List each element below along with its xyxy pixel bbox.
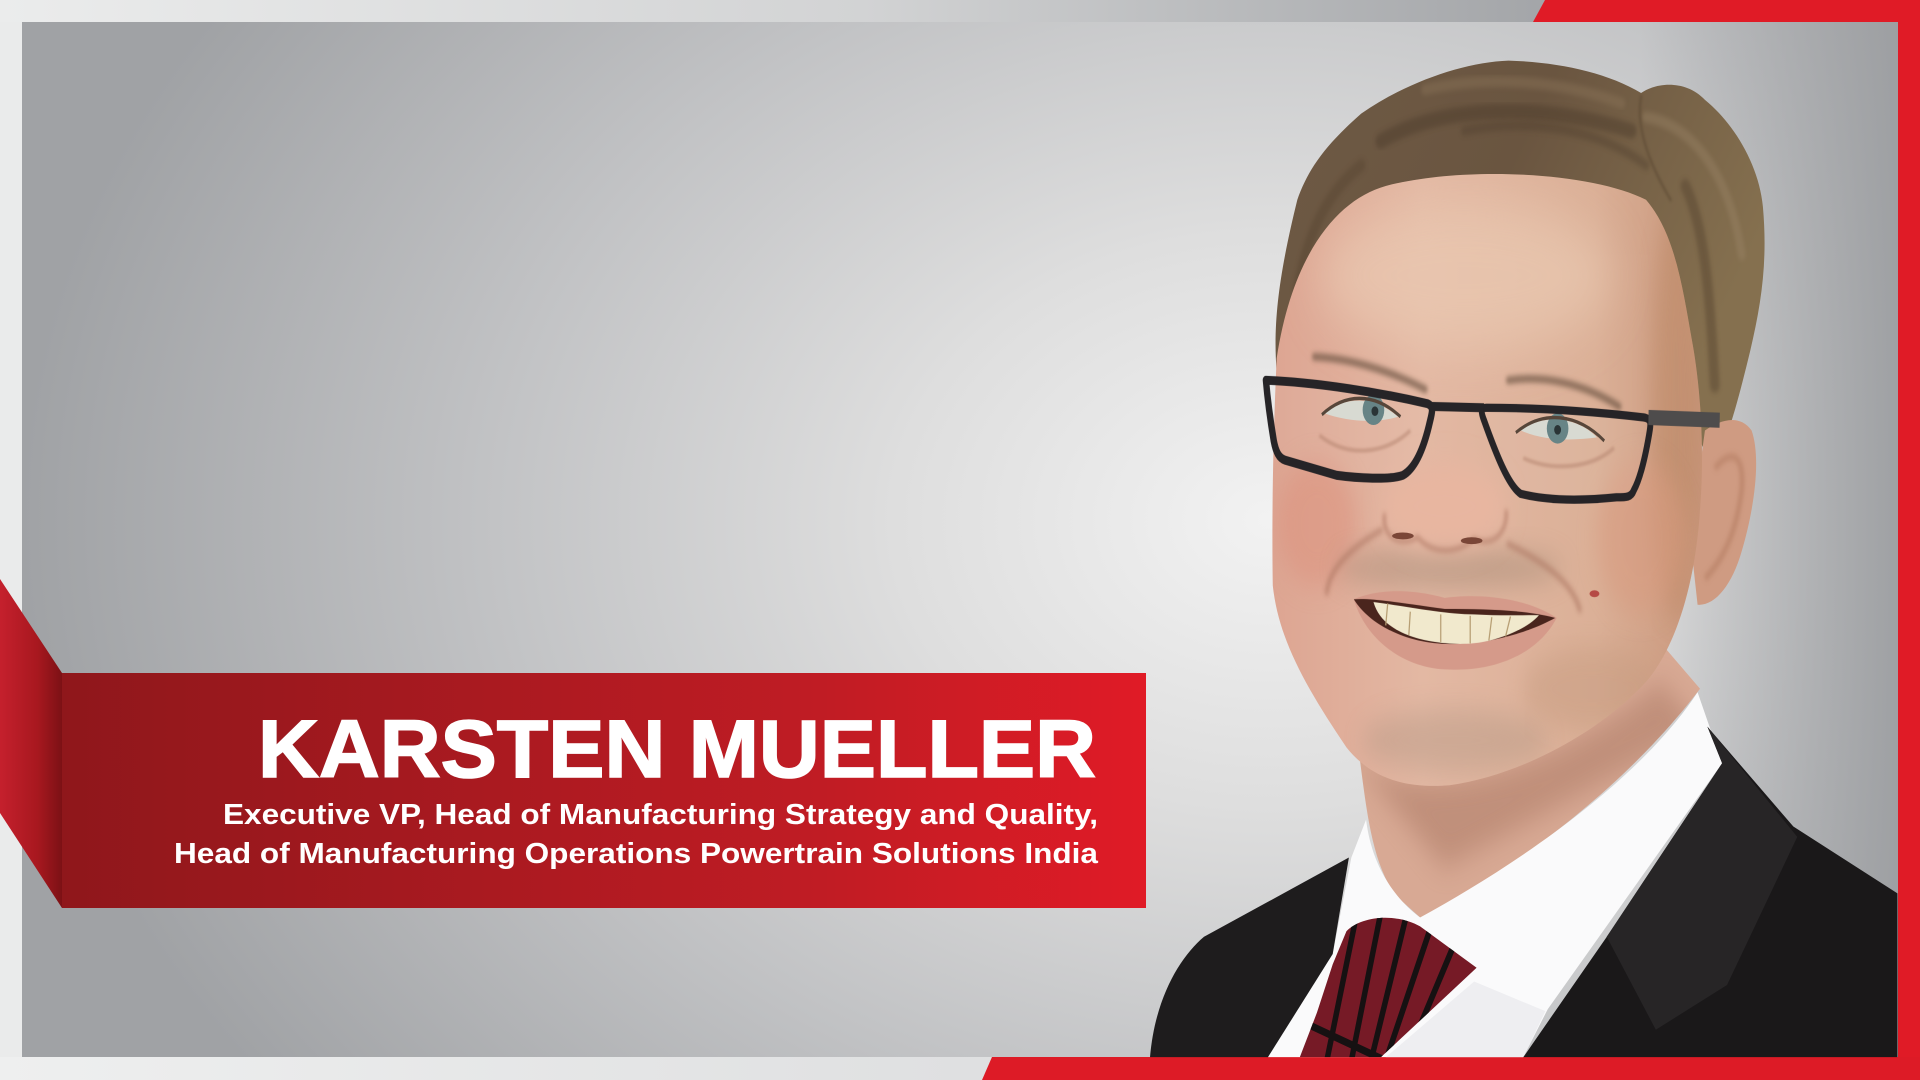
smile lines — [1327, 530, 1580, 610]
name: KARSTEN MUELLER — [258, 704, 1096, 795]
banner background — [62, 673, 1146, 908]
name banner — [62, 673, 1146, 908]
teeth — [1373, 602, 1539, 644]
tie — [1300, 918, 1476, 1058]
jacket lapel — [1607, 727, 1797, 1030]
tooth gaps — [1386, 603, 1510, 643]
shirt and collar — [1268, 692, 1722, 1057]
collar shadow — [1386, 982, 1545, 1057]
right eye — [1516, 413, 1614, 466]
hair back — [1276, 61, 1765, 475]
glasses — [1266, 380, 1720, 500]
mouth — [1354, 591, 1557, 670]
right lens — [1482, 408, 1650, 500]
mole — [1590, 590, 1599, 597]
job title line 1: Executive VP, Head of Manufacturing Strategy and Quality, — [223, 799, 1098, 831]
ear — [1690, 420, 1756, 605]
neck — [1360, 650, 1700, 918]
left lens — [1266, 380, 1432, 478]
face — [1272, 174, 1702, 786]
job title line 2: Head of Manufacturing Operations Powertrain Solutions India — [174, 838, 1099, 870]
nose — [1382, 508, 1509, 554]
left ribbon fold — [0, 579, 62, 908]
top red accent — [1533, 0, 1920, 22]
right red strip — [1898, 0, 1920, 1080]
eyebrows — [1315, 357, 1619, 406]
left eye — [1319, 395, 1410, 451]
inner ear shading — [1705, 457, 1742, 579]
jacket left — [1150, 858, 1349, 1057]
hair strands — [1297, 81, 1742, 386]
face shading — [1278, 200, 1700, 771]
bridge — [1430, 406, 1484, 408]
jacket right — [1523, 727, 1897, 1057]
temple arm — [1648, 417, 1720, 420]
portrait of Karsten Mueller — [1150, 61, 1897, 1061]
bottom red accent — [982, 1057, 1920, 1080]
neck shadow — [1346, 682, 1700, 868]
